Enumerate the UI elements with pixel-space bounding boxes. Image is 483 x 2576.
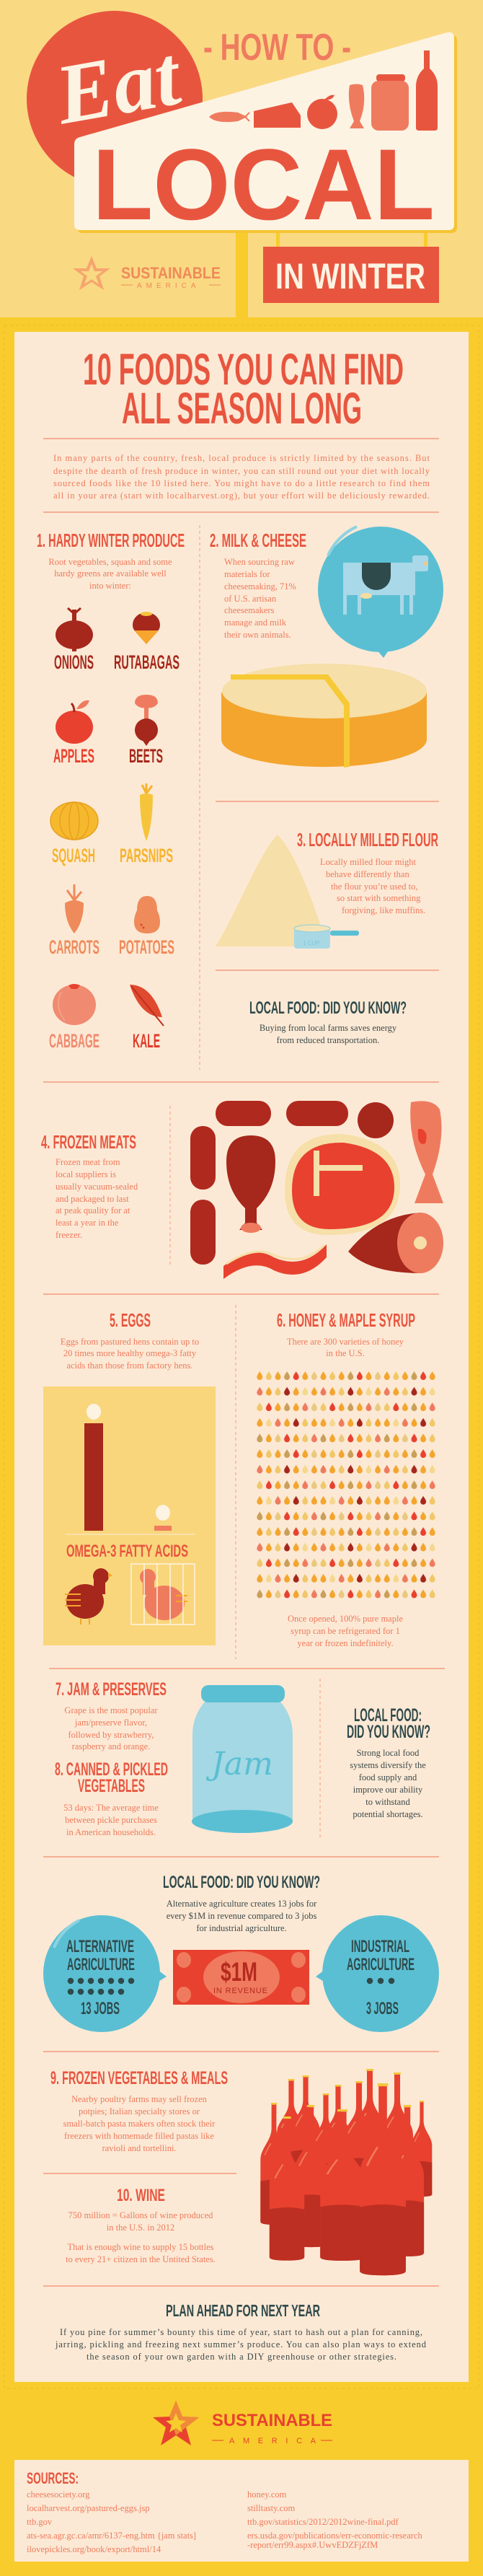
panel: jobs comparison	[43, 1873, 439, 2032]
text: Alternative agriculture creates 13 jobs for	[167, 1899, 317, 1909]
panel: 9 frozen vegetables & meals: freezers with homemade filled pastas like	[64, 2131, 214, 2141]
icon: flour pile with cup: 1 CUP	[303, 940, 320, 946]
text: maple syrup	[288, 1614, 403, 1648]
bubble: industrial agriculture	[316, 1915, 439, 2032]
logo: sustainable america footer: SUSTAINABLE	[212, 2411, 332, 2430]
text: There are 300 varieties of honey	[287, 1337, 404, 1347]
background: header	[0, 0, 483, 317]
how to: - HOW TO -	[203, 27, 351, 69]
icon: beets	[135, 695, 158, 746]
icon: caged hen	[131, 1564, 195, 1625]
callout: did you know energy	[249, 998, 407, 1045]
icon: parsnip	[140, 783, 153, 841]
labels: PARSNIPS	[120, 845, 173, 866]
text: behave differently than	[326, 869, 409, 879]
panel: sources: ers.usda.gov/publications/err-economic-research	[247, 2531, 422, 2541]
panel: 5 eggs	[43, 1309, 216, 1645]
eat script: Eat	[48, 27, 189, 143]
icon: cabbage	[53, 984, 96, 1025]
icon: onion	[56, 608, 93, 651]
icon: $1M bill: IN REVENUE	[213, 1987, 267, 1995]
panel: plan ahead: jarring, pickling and freezing next summer’s produce. You can also plan ways to extend	[55, 2339, 427, 2349]
labels: KALE	[133, 1030, 160, 1052]
logo: sustainable america: SUSTAINABLE	[121, 264, 221, 282]
panel: 7 jam & 8 pickles: raspberry and orange.	[72, 1741, 150, 1751]
chart: 300 honey drops	[255, 1368, 437, 1602]
text: the flour you’re used to,	[331, 882, 417, 892]
bubble: alternative agriculture: 13 JOBS	[81, 1999, 120, 2018]
panel: sources	[14, 2460, 469, 2562]
description: Root vegetables, squash and some	[48, 557, 172, 567]
panel: 9 frozen vegetables & meals: small-batch pasta makers often stock their	[63, 2119, 216, 2129]
text: for industrial agriculture.	[196, 1923, 287, 1933]
local: LOCAL	[92, 128, 435, 241]
text: least a year in the	[56, 1218, 119, 1228]
panel: sources: stilltasty.com	[247, 2503, 295, 2513]
callout: did you know shortages: potential shortages.	[353, 1809, 423, 1819]
text: Frozen meat from	[56, 1157, 120, 1167]
panel: 2 milk & cheese	[210, 527, 443, 768]
text: freezer.	[56, 1230, 82, 1240]
callout: did you know energy: Buying from local farms saves energy	[260, 1023, 397, 1033]
panel: plan ahead: PLAN AHEAD FOR NEXT YEAR	[166, 2301, 320, 2320]
icon: apple	[56, 700, 93, 744]
panel: sources: cheesesociety.org	[27, 2489, 90, 2500]
labels: APPLES	[53, 745, 94, 767]
text	[287, 1337, 404, 1358]
bubble: industrial agriculture: AGRICULTURE	[347, 1955, 415, 1974]
logo: sustainable america: AMERICA	[137, 282, 200, 290]
panel: plan ahead: the season of your own garden with a DIY greenhouse or other strategies.	[87, 2352, 396, 2362]
text: materials for	[224, 569, 270, 579]
text	[167, 1899, 317, 1933]
panel: sources: ttb.gov	[27, 2517, 53, 2527]
heading: LOCAL FOOD: DID YOU KNOW?	[163, 1873, 320, 1892]
panel: 7 jam & 8 pickles: in American households.	[66, 1827, 156, 1837]
text: When sourcing raw	[224, 557, 295, 567]
icon: $1M bill: $1M	[221, 1957, 257, 1987]
panel: 7 jam & 8 pickles: Grape is the most popular	[64, 1705, 158, 1715]
callout: did you know shortages: to withstand	[365, 1797, 410, 1807]
bubble: alternative agriculture	[43, 1915, 167, 2032]
labels: RUTABAGAS	[114, 651, 180, 673]
text: maple syrup: syrup can be refrigerated for 1	[291, 1626, 400, 1636]
labels: SQUASH	[52, 845, 95, 866]
icons on sign	[209, 50, 438, 131]
bubble: alternative agriculture: ALTERNATIVE	[66, 1937, 134, 1956]
panel: 10 wine: 750 million = Gallons of wine produced	[68, 2210, 213, 2220]
chart: omega-3	[43, 1386, 216, 1645]
panel: 3 locally milled flour	[216, 829, 438, 949]
callout: did you know shortages: LOCAL FOOD:	[354, 1705, 422, 1726]
heading: 1. HARDY WINTER PRODUCE	[37, 529, 185, 551]
panel: 7 jam & 8 pickles: jam/preserve flavor,	[74, 1718, 147, 1728]
panel: 9 frozen vegetables & meals: Nearby poultry farms may sell frozen	[71, 2094, 208, 2104]
callout: did you know shortages: food supply and	[359, 1772, 417, 1782]
panel: 7 jam & 8 pickles: 8. CANNED & PICKLED	[55, 1759, 168, 1780]
heading: 4. FROZEN MEATS	[41, 1131, 136, 1153]
icon: squash	[50, 802, 98, 840]
description: into winter:	[89, 581, 131, 591]
bubble: industrial agriculture: 3 JOBS	[366, 1999, 399, 2018]
title	[83, 345, 404, 433]
callout: did you know energy: from reduced transportation.	[277, 1035, 379, 1045]
panel: 10 wine	[66, 2186, 216, 2264]
icon: carrot	[65, 884, 84, 933]
panel: 9 frozen vegetables & meals	[50, 2068, 228, 2153]
text: usually vacuum-sealed	[56, 1182, 138, 1192]
text	[320, 857, 425, 915]
labels: BEETS	[129, 745, 163, 767]
panel: 1 hardy winter produce	[37, 529, 185, 1052]
text: of U.S. artisan	[224, 594, 277, 604]
text: their own animals.	[224, 630, 291, 640]
panel: sources: ilovepickles.org/book/export/html/14	[27, 2544, 161, 2554]
labels	[49, 651, 180, 1052]
callout: did you know shortages: systems diversify the	[350, 1760, 426, 1770]
icon: jam jar: Jam	[205, 1746, 273, 1782]
bubble: industrial agriculture: INDUSTRIAL	[351, 1937, 409, 1956]
panel: plan ahead	[55, 2301, 427, 2362]
text: at peak quality for at	[56, 1205, 130, 1216]
text: cheesemakers	[224, 605, 275, 615]
labels: ONIONS	[54, 651, 94, 673]
logo: sustainable america footer: AMERICA	[229, 2437, 316, 2445]
icon: jam jar	[192, 1685, 293, 1833]
heading: 5. EGGS	[110, 1309, 151, 1331]
text: cheesemaking, 71%	[224, 581, 296, 592]
main panel	[14, 332, 469, 2382]
text	[61, 1337, 199, 1371]
text: forgiving, like muffins.	[342, 905, 425, 915]
panel: 7 jam & 8 pickles	[55, 1679, 168, 1837]
icon: meats illustration	[190, 1101, 443, 1279]
logo: sustainable america footer	[153, 2401, 332, 2445]
text: and packaged to last	[56, 1194, 129, 1204]
panel: 7 jam & 8 pickles: followed by strawberry,	[68, 1730, 154, 1740]
panel: 7 jam & 8 pickles: between pickle purchases	[65, 1815, 157, 1825]
labels: CABBAGE	[49, 1030, 99, 1052]
panel: 10 wine: 10. WINE	[117, 2186, 165, 2205]
sign board	[74, 32, 457, 233]
red circle	[27, 11, 203, 187]
panel: 9 frozen vegetables & meals: 9. FROZEN VEGETABLES & MEALS	[50, 2068, 228, 2088]
text: maple syrup: Once opened, 100% pure maple	[288, 1614, 403, 1624]
panel: 6 honey & maple syrup	[255, 1309, 437, 1648]
text: maple syrup: year or frozen indefinitely.	[297, 1638, 394, 1648]
panel: sources: honey.com	[247, 2489, 287, 2500]
intro text: In many parts of the country, fresh, local produce is strictly limited by the seasons. But	[53, 453, 430, 463]
text: Locally milled flour might	[320, 857, 416, 867]
icon: flour pile with cup	[216, 835, 359, 949]
heading: 2. MILK & CHEESE	[210, 529, 306, 551]
callout: did you know shortages	[347, 1705, 430, 1819]
text: 20 times more healthy omega-3 fatty	[63, 1348, 197, 1358]
text	[56, 1157, 138, 1240]
panel: sources: SOURCES:	[27, 2469, 79, 2487]
icon: rutabaga	[133, 612, 160, 644]
panel: 7 jam & 8 pickles: 7. JAM & PRESERVES	[56, 1679, 167, 1700]
text: Eggs from pastured hens contain up to	[61, 1337, 199, 1347]
labels: POTATOES	[119, 936, 174, 958]
text	[224, 557, 296, 640]
panel: 10 wine: That is enough wine to supply 15 bottles	[67, 2242, 214, 2252]
header	[27, 11, 457, 317]
panel: 10 wine: to every 21+ citizen in the Untited States.	[66, 2254, 216, 2264]
text: acids than those from factory hens.	[67, 1360, 192, 1371]
intro text: despite the dearth of fresh produce in winter, you can still round out your diet with locally	[53, 466, 430, 476]
panel: 10 wine: in the U.S. in 2012	[107, 2223, 174, 2233]
text: in the U.S.	[326, 1348, 365, 1358]
callout: did you know shortages: Strong local food	[357, 1748, 420, 1758]
icon: potato	[134, 896, 160, 933]
icon: cheese wheel	[221, 664, 427, 768]
intro text: all in your area (start with localharvest.org), but your effort will be deliciously rewarded.	[53, 491, 430, 501]
intro text: sourced foods like the 10 listed here. You might have to do a little research to find them	[53, 478, 430, 488]
icon: cow bubble	[318, 527, 443, 658]
text: every $1M in revenue compared to 3 jobs	[167, 1911, 316, 1921]
callout: did you know shortages: improve our ability	[353, 1785, 423, 1795]
panel: 7 jam & 8 pickles: VEGETABLES	[78, 1776, 145, 1796]
bubble: alternative agriculture: AGRICULTURE	[67, 1955, 135, 1974]
icon: kale	[130, 985, 164, 1026]
text: local suppliers is	[56, 1169, 116, 1179]
intro text	[53, 453, 430, 501]
panel: 9 frozen vegetables & meals: potpies; Italian specialty stores or	[79, 2106, 200, 2116]
icon: pastured hen	[65, 1568, 112, 1625]
icon: $1M bill	[173, 1950, 309, 2005]
description	[48, 557, 172, 591]
logo: sustainable america	[73, 256, 221, 290]
labels: CARROTS	[49, 936, 99, 958]
posts	[236, 227, 427, 317]
in winter box: IN WINTER	[275, 256, 425, 296]
in winter box	[263, 247, 439, 303]
description: hardy greens are available well	[54, 568, 167, 579]
panel: 7 jam & 8 pickles: 53 days: The average time	[63, 1803, 159, 1813]
text: manage and milk	[224, 617, 287, 628]
icon: wine bottles	[260, 2069, 432, 2275]
panel: sources: -report/err99.aspx#.UwvEDZFjZfM	[247, 2540, 378, 2550]
panel: 4 frozen meats	[41, 1101, 443, 1279]
panel: 9 frozen vegetables & meals: ravioli and tortellini.	[102, 2143, 177, 2153]
panel: sources: ats-sea.agr.gc.ca/amr/6137-eng.htm {jam stats]	[27, 2531, 196, 2541]
panel: sources: ttb.gov/statistics/2012/2012wine-final.pdf	[247, 2517, 399, 2527]
chart: omega-3: OMEGA-3 FATTY ACIDS	[66, 1542, 188, 1561]
panel: sources: localharvest.org/pastured-eggs.jsp	[27, 2503, 150, 2513]
text: so start with something	[337, 893, 421, 903]
panel: plan ahead: If you pine for summer’s bounty this time of year, start to hash out a plan for canning,	[60, 2327, 422, 2337]
